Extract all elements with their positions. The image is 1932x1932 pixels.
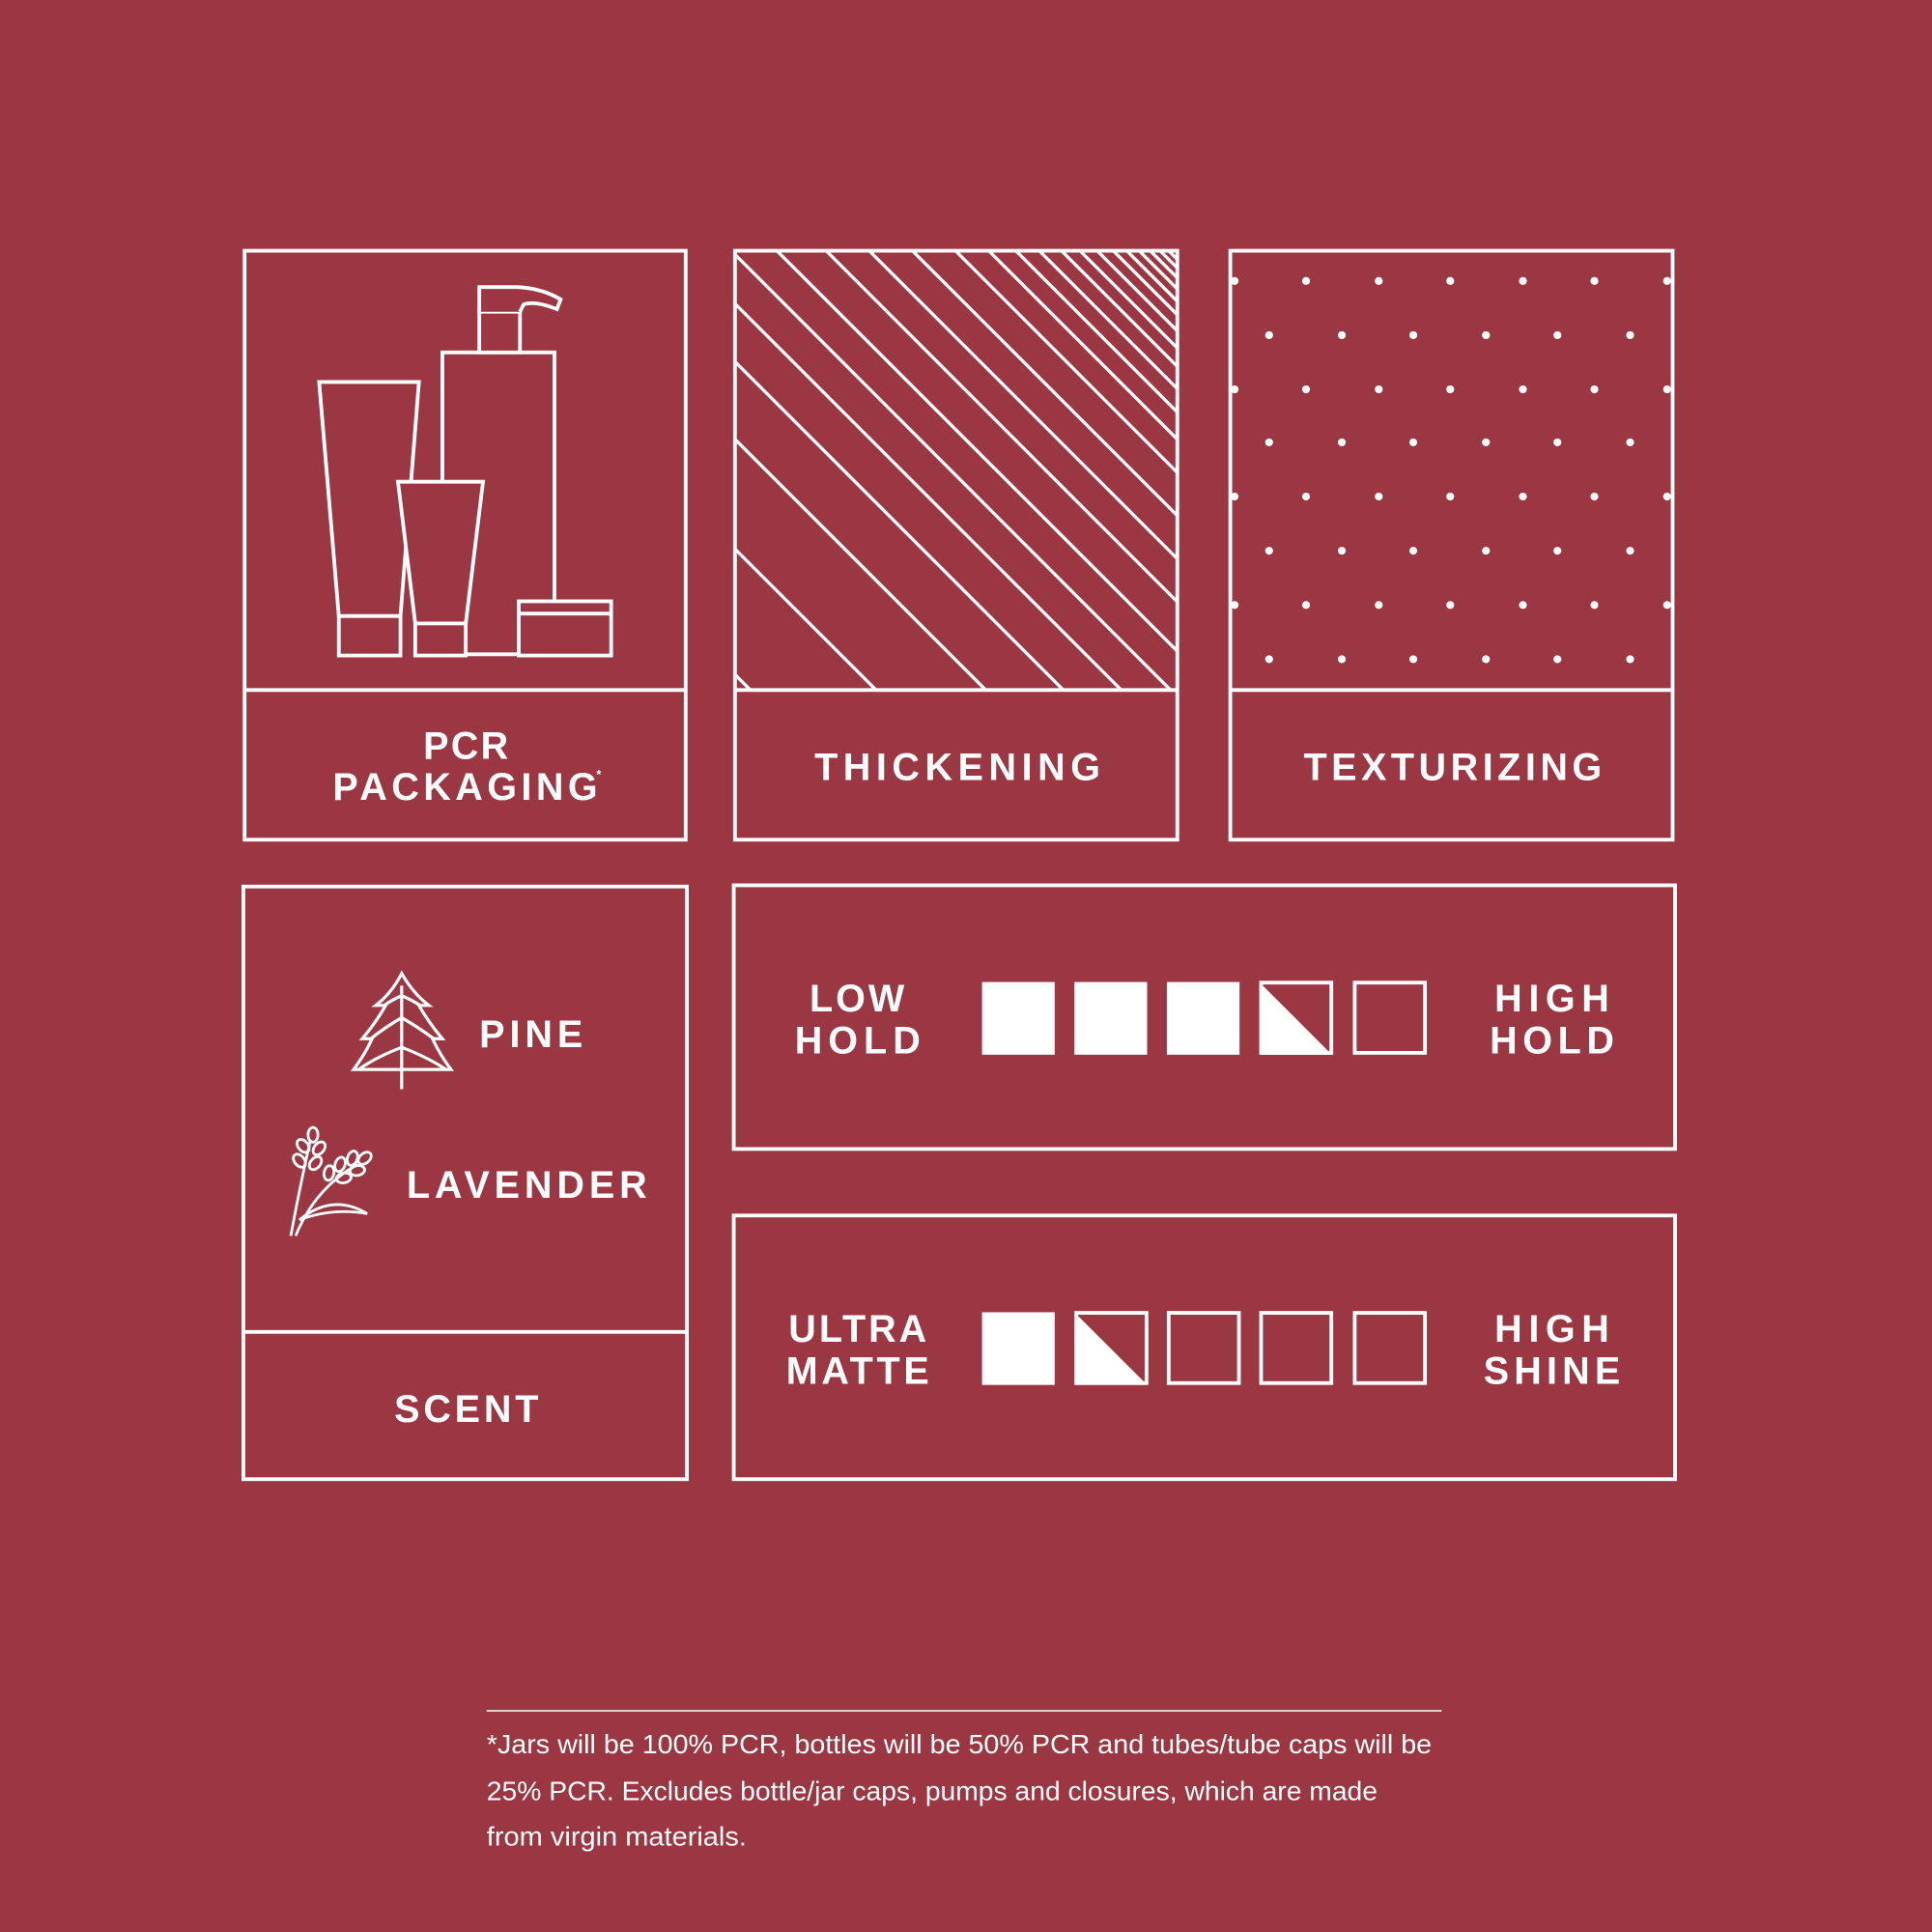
- label: lavender: LAVENDER: [407, 1164, 647, 1207]
- scale: 1.5 of 5: [982, 1312, 1425, 1385]
- icon: pine tree: [354, 974, 451, 1090]
- panel: hold scale: [734, 885, 1675, 1149]
- footnote: *Jars will be 100% PCR, bottles will be 50% PCR and tubes/tube caps will be: [487, 1729, 1432, 1759]
- pattern: diagonal stripes: [736, 253, 1176, 688]
- panel: PCR packaging: [244, 251, 686, 839]
- label: scent: SCENT: [394, 1388, 538, 1431]
- pattern: dots: [1231, 277, 1671, 663]
- footnote: 25% PCR. Excludes bottle/jar caps, pumps and closures, which are made: [487, 1776, 1378, 1806]
- label: ultra matte: ULTRA: [788, 1308, 926, 1350]
- label: high hold: HOLD: [1490, 1020, 1614, 1063]
- label: ultra matte: [786, 1308, 929, 1392]
- label: low hold: [795, 978, 921, 1063]
- panel: thickening: [734, 250, 1611, 839]
- label: pine: PINE: [479, 1013, 582, 1056]
- scale: 3.5 of 5: [982, 982, 1425, 1055]
- panel: shine scale: [734, 1215, 1675, 1479]
- label: PCR packaging: *: [596, 767, 601, 781]
- label: texturizing: TEXTURIZING: [1303, 746, 1602, 788]
- label: PCR packaging: PACKAGING: [332, 766, 598, 809]
- label: high shine: SHINE: [1484, 1350, 1620, 1392]
- panel: scent: [242, 887, 688, 1479]
- label: ultra matte: MATTE: [786, 1350, 929, 1392]
- label: high hold: [1490, 978, 1614, 1063]
- label: low hold: LOW: [810, 978, 905, 1020]
- label: low hold: HOLD: [795, 1020, 921, 1063]
- panel: texturizing: [1230, 251, 1673, 839]
- label: high hold: HIGH: [1494, 978, 1609, 1020]
- label: thickening: THICKENING: [814, 746, 1100, 788]
- footnote: [487, 1711, 1441, 1852]
- icon: packaging bottles: [319, 287, 611, 656]
- icon: lavender: [291, 1127, 374, 1236]
- footnote: from virgin materials.: [487, 1822, 747, 1852]
- label: PCR packaging: PCR: [423, 725, 508, 768]
- label: high shine: HIGH: [1494, 1308, 1609, 1350]
- label: high shine: [1484, 1308, 1620, 1392]
- label: PCR packaging: [332, 725, 601, 809]
